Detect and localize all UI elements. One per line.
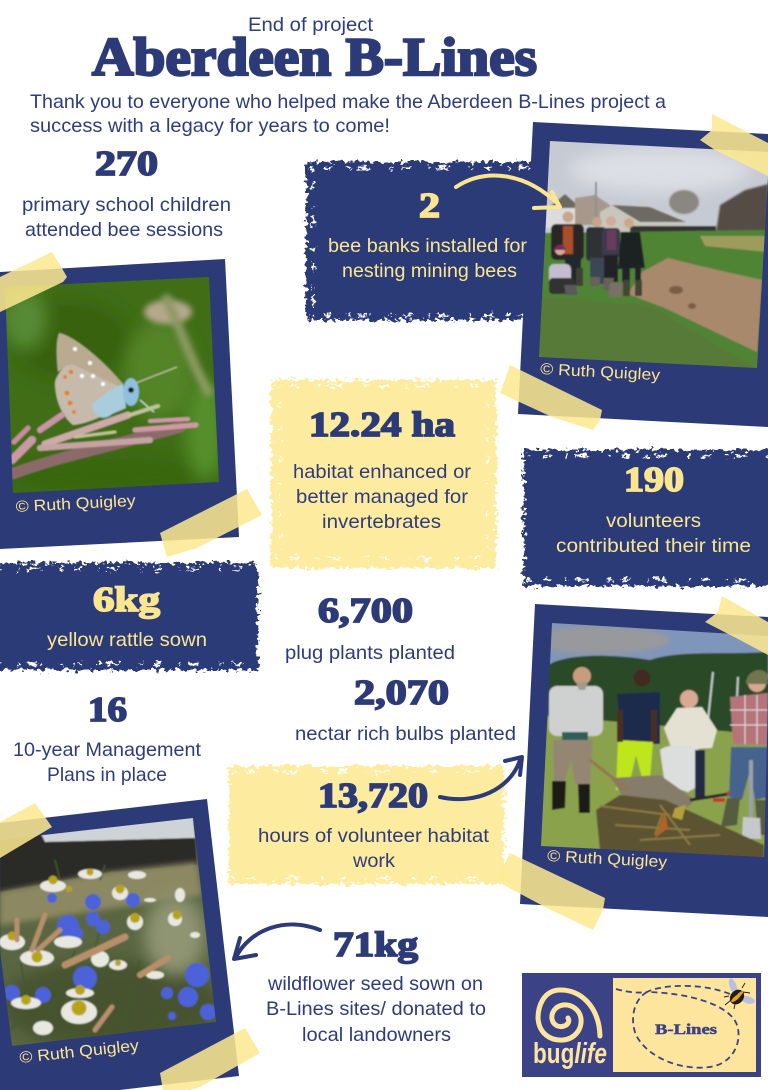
icon: buglife spiral — [538, 990, 600, 1040]
photo frame: wildflowers: © Ruth Quigley — [19, 1038, 140, 1067]
panel: yellow rattle: 6kg — [93, 580, 161, 619]
panel: volunteer hours: 13,720 — [318, 776, 428, 815]
stat: 270 school children — [22, 144, 231, 241]
panel: habitat enhanced — [271, 380, 496, 568]
panel: volunteers: contributed their time — [556, 535, 751, 557]
stat: wildflower seed — [266, 925, 486, 1046]
stat: nectar bulbs — [295, 673, 516, 745]
logo: buglife and B-Lines — [522, 973, 761, 1077]
stat: wildflower seed: local landowners — [302, 1024, 451, 1046]
panel: bee banks — [306, 162, 556, 320]
panel: volunteers: volunteers — [606, 510, 701, 532]
stat: management plans: 10-year Management — [13, 739, 202, 761]
intro text: Thank you to everyone who helped make the Aberdeen B-Lines project a — [30, 91, 666, 113]
panel: volunteers — [524, 450, 768, 586]
logo: buglife and B-Lines: B-Lines — [655, 1022, 717, 1038]
panel: habitat enhanced: habitat enhanced or — [293, 461, 472, 483]
photo frame: wildflowers — [0, 799, 239, 1090]
panel: yellow rattle: yellow rattle sown — [47, 629, 207, 651]
icon: navy arrow to volunteers photo — [440, 757, 522, 799]
icon: navy arrow to wildflower photo — [234, 924, 320, 959]
panel: habitat enhanced: invertebrates — [322, 511, 441, 533]
stat: 270 school children: primary school children — [22, 194, 231, 216]
stat: plug plants — [285, 591, 455, 664]
stat: management plans: Plans in place — [47, 764, 167, 786]
stat: 270 school children: attended bee sessions — [25, 219, 223, 241]
panel: volunteer hours — [229, 766, 504, 884]
photo frame: bee bank volunteers — [518, 122, 768, 427]
panel: bee banks: bee banks installed for — [328, 235, 528, 257]
panel: volunteers: 190 — [624, 460, 684, 499]
photo frame: butterfly — [0, 259, 239, 549]
stat: management plans: 16 — [88, 690, 127, 729]
photo frame: bee bank volunteers: © Ruth Quigley — [540, 361, 661, 384]
intro text: success with a legacy for years to come! — [30, 115, 390, 137]
stat: nectar bulbs: 2,070 — [354, 673, 449, 712]
photo frame: habitat volunteers: © Ruth Quigley — [547, 848, 668, 871]
photo frame: habitat volunteers — [520, 604, 768, 917]
stat: 270 school children: 270 — [95, 144, 158, 183]
stat: wildflower seed: B-Lines sites/ donated to — [266, 998, 486, 1020]
logo: buglife and B-Lines: buglife — [533, 1038, 607, 1070]
icon: bumblebee — [724, 977, 756, 1009]
photo frame: butterfly: © Ruth Quigley — [15, 493, 136, 516]
icon: yellow arrow to bee bank photo — [456, 176, 560, 208]
stat: management plans — [13, 690, 202, 786]
panel: bee banks: 2 — [419, 186, 440, 225]
panel: habitat enhanced: better managed for — [296, 486, 469, 508]
stat: plug plants: 6,700 — [318, 591, 413, 630]
stat: wildflower seed: 71kg — [333, 925, 419, 964]
heading: end of project: End of project — [248, 14, 374, 36]
panel: volunteer hours: hours of volunteer habitat — [258, 825, 490, 847]
panel: yellow rattle — [0, 563, 258, 670]
panel: volunteer hours: work — [352, 850, 395, 872]
stat: plug plants: plug plants planted — [285, 642, 455, 664]
intro text — [30, 91, 666, 137]
title: Aberdeen B-Lines — [92, 27, 537, 87]
panel: habitat enhanced: 12.24 ha — [309, 405, 455, 444]
stat: wildflower seed: wildflower seed sown on — [267, 973, 483, 995]
stat: nectar bulbs: nectar rich bulbs planted — [295, 723, 516, 745]
panel: bee banks: nesting mining bees — [342, 260, 517, 282]
